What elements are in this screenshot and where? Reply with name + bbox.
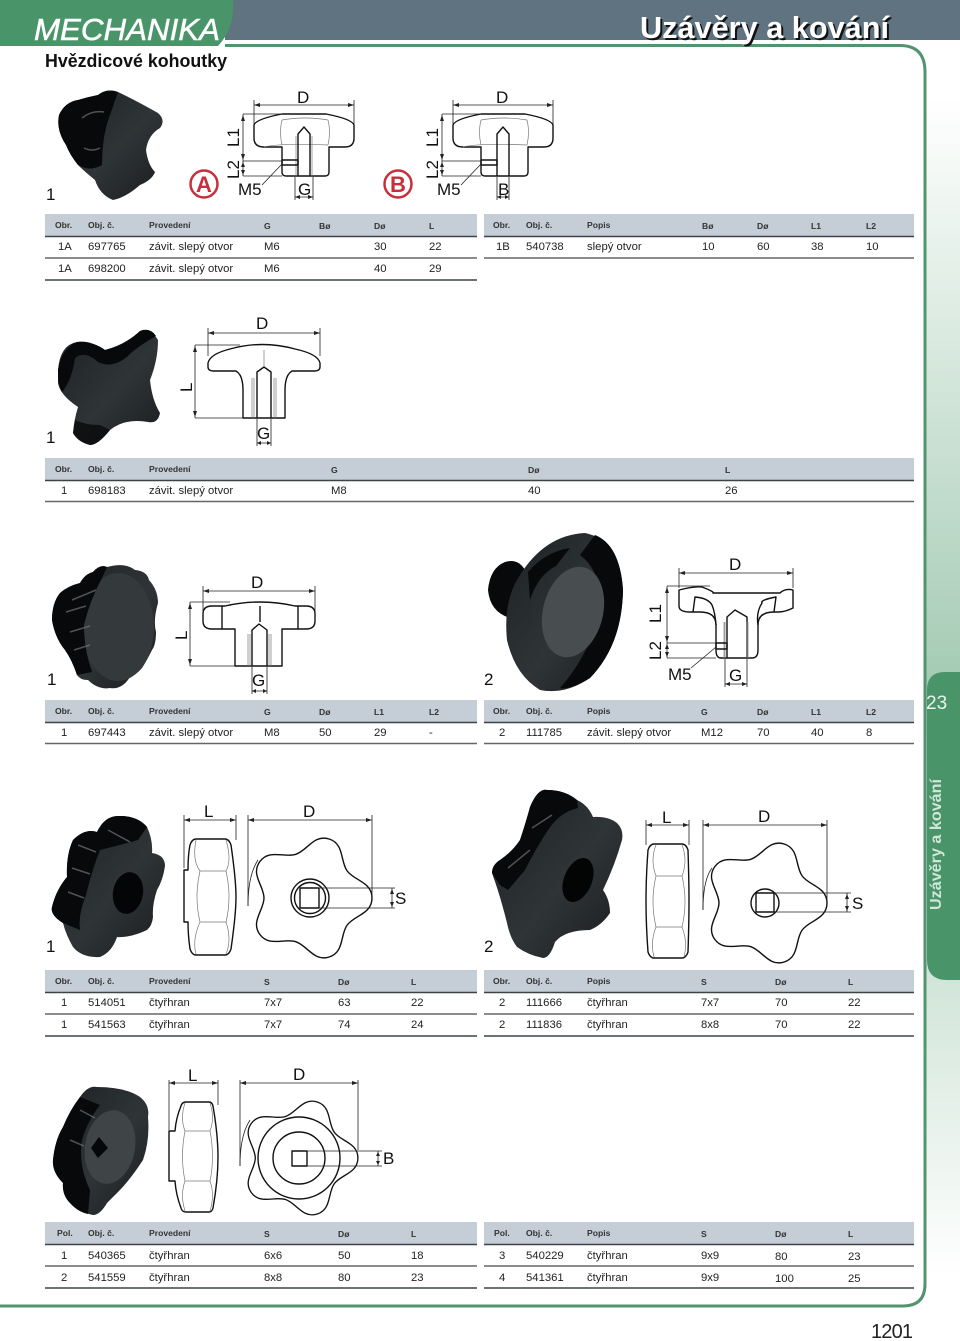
drawing: knob A: D [297, 88, 309, 107]
table: five-lobe knob 1: 74 [338, 1019, 351, 1031]
table: five-lobe knob 1: 1 [61, 997, 67, 1009]
table: Pol 3-4: 100 [775, 1273, 794, 1285]
subheading: Hvězdicové kohoutky [45, 51, 227, 71]
table: lobed knob 1: 50 [319, 727, 332, 739]
table: M8 four-arm: 1 [61, 485, 67, 497]
table: Pol 3-4: Obj. č. [526, 1228, 552, 1238]
figure number: 1 [47, 670, 56, 689]
table: five-lobe knob 2: 22 [848, 1019, 861, 1031]
table: disc knob 2: M12 [701, 727, 723, 739]
drawing: five-lobe knob 2: S [852, 894, 863, 913]
photo: knob with square hole [53, 1087, 148, 1215]
table: five-lobe knob 1: čtyřhran [149, 997, 190, 1009]
drawing: five-lobe knob 2: D [758, 807, 770, 826]
sidebar tab [926, 672, 960, 980]
table 1B: Bø [702, 221, 714, 231]
table: five-lobe knob 1: 514051 [88, 997, 126, 1009]
drawing: knob A: L1 [224, 128, 243, 147]
table 1A: M6 [264, 241, 280, 253]
table: Pol 3-4: 4 [499, 1272, 505, 1284]
drawing: lobed knob 1 [172, 573, 315, 694]
table: Pol 3-4: Pol. [494, 1228, 510, 1238]
table: five-lobe knob 1: 24 [411, 1019, 424, 1031]
table: Pol 1-2: Pol. [57, 1228, 73, 1238]
table: Pol 1-2: čtyřhran [149, 1272, 190, 1284]
drawing: four-arm knob [177, 314, 320, 446]
table 1A [45, 214, 477, 280]
section tab [0, 0, 233, 46]
table: M8 four-arm: L [725, 465, 730, 475]
drawing: disc knob 2: G [729, 666, 742, 685]
table: Pol 1-2: 18 [411, 1250, 424, 1262]
table: lobed knob 1: L1 [374, 707, 384, 717]
table: lobed knob 1: Obr. [55, 706, 72, 716]
table 1A: Bø [319, 221, 331, 231]
table: Pol 3-4: S [701, 1229, 707, 1239]
table 1A: Provedení [149, 220, 191, 230]
table: five-lobe knob 2: 2 [499, 997, 505, 1009]
drawing: five-lobe knob 1: L [204, 802, 213, 821]
table: M8 four-arm: G [331, 465, 338, 475]
table 1A: závit. slepý otvor [149, 241, 233, 253]
table 1B [484, 214, 914, 258]
table 1A: 697765 [88, 241, 126, 253]
table 1B: Popis [587, 220, 611, 230]
table: Pol 1-2: S [264, 1229, 270, 1239]
drawing: lobed knob 1: D [251, 573, 263, 592]
table: Pol 1-2: 23 [411, 1272, 424, 1284]
table: five-lobe knob 2: Obr. [493, 976, 510, 986]
table: M8 four-arm: M8 [331, 485, 347, 497]
table: disc knob 2: Dø [757, 707, 769, 717]
table: lobed knob 1 [45, 700, 477, 744]
photo: knob 1 [46, 91, 163, 204]
table: Pol 3-4: 540229 [526, 1250, 564, 1262]
table: Pol 3-4: Dø [775, 1229, 787, 1239]
table: lobed knob 1: L2 [429, 707, 439, 717]
table: Pol 1-2: Dø [338, 1229, 350, 1239]
drawing: knob B: D [496, 88, 508, 107]
drawing: four-arm knob: L [177, 383, 196, 392]
drawing: five-lobe knob 2 [646, 807, 863, 963]
table: disc knob 2: Obj. č. [526, 706, 552, 716]
drawing: four-arm knob: D [256, 314, 268, 333]
photo: five-lobe knob 2 [484, 790, 622, 958]
table: lobed knob 1: 697443 [88, 727, 126, 739]
figure number: 1 [46, 428, 55, 447]
table: Pol 3-4: čtyřhran [587, 1272, 628, 1284]
header bar [225, 0, 960, 40]
table: M8 four-arm: Dø [528, 465, 540, 475]
table: disc knob 2: 40 [811, 727, 824, 739]
table: five-lobe knob 2: 7x7 [701, 997, 719, 1009]
drawing: lobed knob 1: G [252, 671, 265, 690]
table 1A: Dø [374, 221, 386, 231]
drawing: five-lobe knob 1: S [395, 889, 406, 908]
table: Pol 3-4: 80 [775, 1251, 788, 1263]
table: Pol 1-2 [45, 1222, 477, 1288]
table: M8 four-arm [45, 458, 914, 502]
table: disc knob 2: 2 [499, 727, 505, 739]
drawing: knob B: L1 [423, 128, 442, 147]
table: M8 four-arm: Obj. č. [88, 464, 114, 474]
table 1A: L [429, 221, 434, 231]
table: disc knob 2: 70 [757, 727, 770, 739]
title: MECHANIKA [34, 12, 220, 47]
table: Pol 3-4: 9x9 [701, 1250, 719, 1262]
table: five-lobe knob 2: Popis [587, 976, 611, 986]
table 1B: Dø [757, 221, 769, 231]
table: Pol 3-4: 25 [848, 1273, 861, 1285]
drawing: four-arm knob: G [257, 424, 270, 443]
table: Pol 3-4: 9x9 [701, 1272, 719, 1284]
table: M8 four-arm: 26 [725, 485, 738, 497]
badge B [384, 170, 412, 198]
drawing: disc knob 2: M5 [668, 665, 692, 684]
table: five-lobe knob 2: Obj. č. [526, 976, 552, 986]
table: Pol 3-4: Popis [587, 1228, 611, 1238]
table: five-lobe knob 1: S [264, 977, 270, 987]
table 1A: G [264, 221, 271, 231]
table: five-lobe knob 2: L [848, 977, 853, 987]
drawing: knob B: M5 [437, 180, 461, 199]
table: disc knob 2: 8 [866, 727, 872, 739]
drawing: knob A: G [298, 180, 311, 199]
table: five-lobe knob 1: Obr. [55, 976, 72, 986]
table: Pol 3-4: L [848, 1229, 853, 1239]
table: lobed knob 1: Dø [319, 707, 331, 717]
drawing: knob A: L2 [224, 160, 243, 179]
table: disc knob 2: G [701, 707, 708, 717]
drawing: five-lobe knob 2: L [662, 808, 671, 827]
table: Pol 3-4: 3 [499, 1250, 505, 1262]
table: Pol 1-2: čtyřhran [149, 1250, 190, 1262]
table 1A: 29 [429, 263, 442, 275]
table: five-lobe knob 1: 541563 [88, 1019, 126, 1031]
table 1B: 540738 [526, 241, 564, 253]
table: M8 four-arm: závit. slepý otvor [149, 485, 233, 497]
table: M8 four-arm: Provedení [149, 464, 191, 474]
table: disc knob 2: L1 [811, 707, 821, 717]
table: five-lobe knob 2: čtyřhran [587, 997, 628, 1009]
table: disc knob 2: závit. slepý otvor [587, 727, 671, 739]
figure number: 1 [46, 185, 55, 204]
table: lobed knob 1: M8 [264, 727, 280, 739]
table: disc knob 2: Obr. [493, 706, 510, 716]
table: five-lobe knob 1 [45, 970, 477, 1036]
photo: disc knob 2 [484, 533, 623, 691]
table: five-lobe knob 1: 1 [61, 1019, 67, 1031]
table: five-lobe knob 1: Dø [338, 977, 350, 987]
table: lobed knob 1: Obj. č. [88, 706, 114, 716]
page side strip [926, 46, 960, 1316]
table 1A: 698200 [88, 263, 126, 275]
table 1A: 1A [58, 263, 72, 275]
table: Pol 1-2: L [411, 1229, 416, 1239]
table: five-lobe knob 2: 8x8 [701, 1019, 719, 1031]
table 1A: 40 [374, 263, 387, 275]
drawing: knob with square hole: B [383, 1149, 394, 1168]
table 1B: slepý otvor [587, 241, 642, 253]
drawing: knob with square hole: L [188, 1066, 197, 1085]
table 1A: 22 [429, 241, 442, 253]
table: lobed knob 1: 29 [374, 727, 387, 739]
table: Pol 1-2: 50 [338, 1250, 351, 1262]
table: disc knob 2: 111785 [526, 727, 562, 739]
photo: lobed knob 1 [47, 565, 158, 689]
table 1B: 10 [866, 241, 879, 253]
table 1A: závit. slepý otvor [149, 263, 233, 275]
table: five-lobe knob 1: 22 [411, 997, 424, 1009]
table 1B: Obr. [493, 220, 510, 230]
drawing: knob A: A [196, 172, 212, 197]
table: Pol 1-2: Provedení [149, 1228, 191, 1238]
photo: four-arm knob [46, 330, 160, 447]
table: five-lobe knob 1: 7x7 [264, 997, 282, 1009]
table: Pol 1-2: 2 [61, 1272, 67, 1284]
table: Pol 3-4 [484, 1222, 914, 1288]
table: five-lobe knob 1: čtyřhran [149, 1019, 190, 1031]
table: five-lobe knob 1: 63 [338, 997, 351, 1009]
table: five-lobe knob 1: 7x7 [264, 1019, 282, 1031]
table: lobed knob 1: - [429, 727, 433, 739]
table: five-lobe knob 1: Provedení [149, 976, 191, 986]
table: Pol 1-2: 80 [338, 1272, 351, 1284]
table 1A: Obr. [55, 220, 72, 230]
drawing: disc knob 2: L2 [646, 641, 665, 660]
drawing: knob with square hole [169, 1065, 394, 1215]
table: Pol 1-2: 6x6 [264, 1250, 282, 1262]
table: disc knob 2: Popis [587, 706, 611, 716]
sidebar label: Uzávěry a kování [928, 778, 945, 910]
drawing: knob B [384, 88, 553, 200]
table: five-lobe knob 2: 111836 [526, 1019, 562, 1031]
table 1B: L1 [811, 221, 821, 231]
chapter number: 23 [926, 693, 947, 714]
drawing: knob with square hole: D [293, 1065, 305, 1084]
chapter heading: Uzávěry a kování [642, 13, 893, 47]
table: five-lobe knob 2: čtyřhran [587, 1019, 628, 1031]
table 1B: 10 [702, 241, 715, 253]
table 1B: L2 [866, 221, 876, 231]
chapter heading: Uzávěry a kování [640, 11, 891, 45]
table: five-lobe knob 2: 70 [775, 1019, 788, 1031]
table: five-lobe knob 2 [484, 970, 914, 1036]
table: lobed knob 1: závit. slepý otvor [149, 727, 233, 739]
table: five-lobe knob 2: 2 [499, 1019, 505, 1031]
drawing: disc knob 2: L1 [646, 604, 665, 623]
table: disc knob 2: L2 [866, 707, 876, 717]
table: Pol 1-2: 8x8 [264, 1272, 282, 1284]
table: five-lobe knob 2: 111666 [526, 997, 562, 1009]
table: lobed knob 1: 1 [61, 727, 67, 739]
drawing: knob B: L2 [423, 160, 442, 179]
table 1B: 1B [496, 241, 510, 253]
table: five-lobe knob 2: 70 [775, 997, 788, 1009]
table 1A: Obj. č. [88, 220, 114, 230]
drawing: five-lobe knob 1: D [303, 802, 315, 821]
figure number: 2 [484, 937, 493, 956]
table: Pol 1-2: 1 [61, 1250, 67, 1262]
drawing: knob A: M5 [238, 180, 262, 199]
table: Pol 1-2: 541559 [88, 1272, 126, 1284]
drawing: five-lobe knob 1 [184, 802, 406, 958]
drawing: knob B: B [390, 172, 406, 197]
table: Pol 3-4: 23 [848, 1251, 861, 1263]
table 1A: 30 [374, 241, 387, 253]
table 1B: Obj. č. [526, 220, 552, 230]
drawing: knob A [190, 88, 354, 200]
figure number: 1 [46, 937, 55, 956]
table 1A: M6 [264, 263, 280, 275]
table: five-lobe knob 1: L [411, 977, 416, 987]
table: five-lobe knob 2: S [701, 977, 707, 987]
table: five-lobe knob 2: Dø [775, 977, 787, 987]
table: Pol 3-4: čtyřhran [587, 1250, 628, 1262]
drawing: disc knob 2 [646, 555, 793, 687]
drawing: lobed knob 1: L [172, 631, 191, 640]
photo: five-lobe knob 1 [46, 816, 165, 957]
drawing: knob B: B [498, 180, 509, 199]
table: M8 four-arm: 698183 [88, 485, 126, 497]
table: Pol 3-4: 541361 [526, 1272, 564, 1284]
drawing: disc knob 2: D [729, 555, 741, 574]
table: Pol 1-2: Obj. č. [88, 1228, 114, 1238]
table: disc knob 2 [484, 700, 914, 744]
badge A [190, 170, 218, 198]
table 1B: 60 [757, 241, 770, 253]
table: M8 four-arm: 40 [528, 485, 541, 497]
table 1A: 1A [58, 241, 72, 253]
table: five-lobe knob 1: Obj. č. [88, 976, 114, 986]
table: Pol 1-2: 540365 [88, 1250, 126, 1262]
table: lobed knob 1: G [264, 707, 271, 717]
table: lobed knob 1: Provedení [149, 706, 191, 716]
table 1B: 38 [811, 241, 824, 253]
table: five-lobe knob 2: 22 [848, 997, 861, 1009]
figure number: 2 [484, 670, 493, 689]
table: M8 four-arm: Obr. [55, 464, 72, 474]
